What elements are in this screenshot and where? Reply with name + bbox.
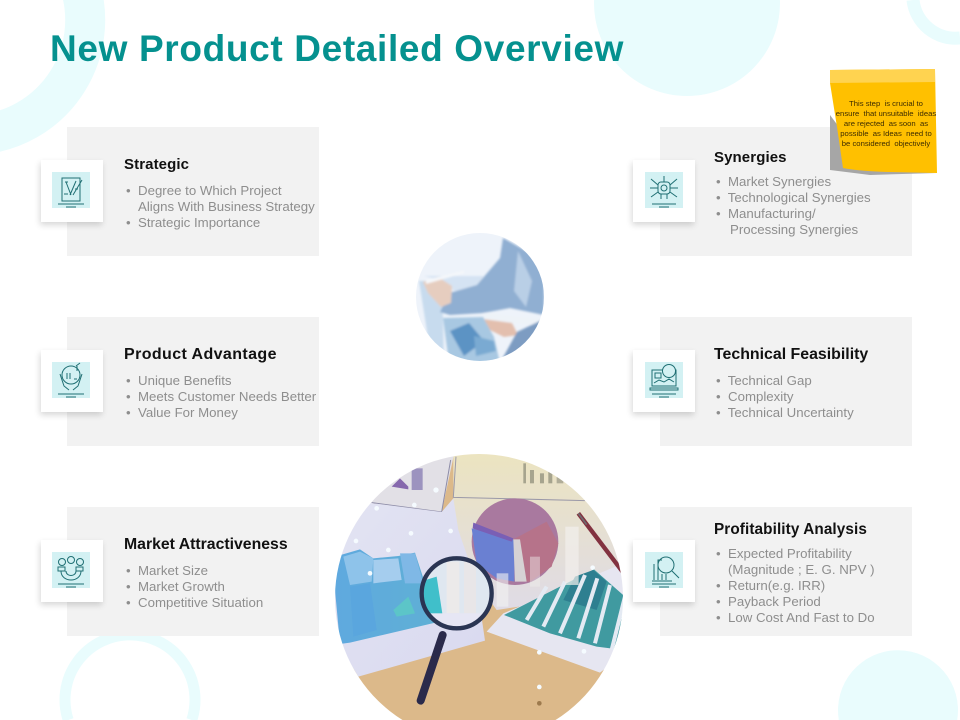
- icon: strategic: [41, 160, 103, 222]
- heading: market attractiveness: Market Attractiveness: [124, 536, 288, 553]
- heading: strategic: Strategic: [124, 156, 189, 173]
- icon: market attractiveness: [41, 540, 103, 602]
- panel: synergies: [660, 127, 912, 256]
- panel: technical feasibility: [660, 317, 912, 446]
- text: strategic bullets: • Degree to Which Project Aligns With Business Strategy • Strategic Importance: [126, 183, 315, 230]
- photo: charts and magnifying glass (large circle): [335, 454, 623, 720]
- icon: technical feasibility: [633, 350, 695, 412]
- heading: technical feasibility: Technical Feasibility: [714, 346, 868, 363]
- heading: synergies: Synergies: [714, 149, 787, 166]
- text: profitability bullets: • Expected Profitability (Magnitude ; E. G. NPV ) • Return(e.g. IRR) • Payback Period • Low Cost And Fast to Do: [716, 546, 875, 625]
- panel: market attractiveness: [67, 507, 319, 636]
- text: technical feasibility bullets: • Technical Gap • Complexity • Technical Uncertainty: [716, 373, 854, 420]
- title: New Product Detailed Overview: [50, 28, 624, 69]
- panel: strategic: [67, 127, 319, 256]
- icon: product advantage: [41, 350, 103, 412]
- heading: product advantage: Product Advantage: [124, 346, 277, 363]
- icon: profitability analysis: [633, 540, 695, 602]
- text: synergies bullets: • Market Synergies • Technological Synergies • Manufacturing/ Processing Synergies: [716, 174, 871, 237]
- sticky note: [830, 69, 937, 175]
- panel: profitability analysis: [660, 507, 912, 636]
- text: market attractiveness bullets: • Market Size • Market Growth • Competitive Situation: [126, 563, 263, 610]
- panel: product advantage: [67, 317, 319, 446]
- photo: businessman at laptop (small circle): [416, 233, 544, 361]
- sticky note text: This step is crucial to ensure that unsuitable ideas are rejected as soon as possible as Ideas need to be considered objectively: [836, 99, 936, 148]
- text: product advantage bullets: • Unique Benefits • Meets Customer Needs Better • Value For Money: [126, 373, 316, 420]
- icon: synergies: [633, 160, 695, 222]
- heading: profitability analysis: Profitability Analysis: [714, 521, 867, 538]
